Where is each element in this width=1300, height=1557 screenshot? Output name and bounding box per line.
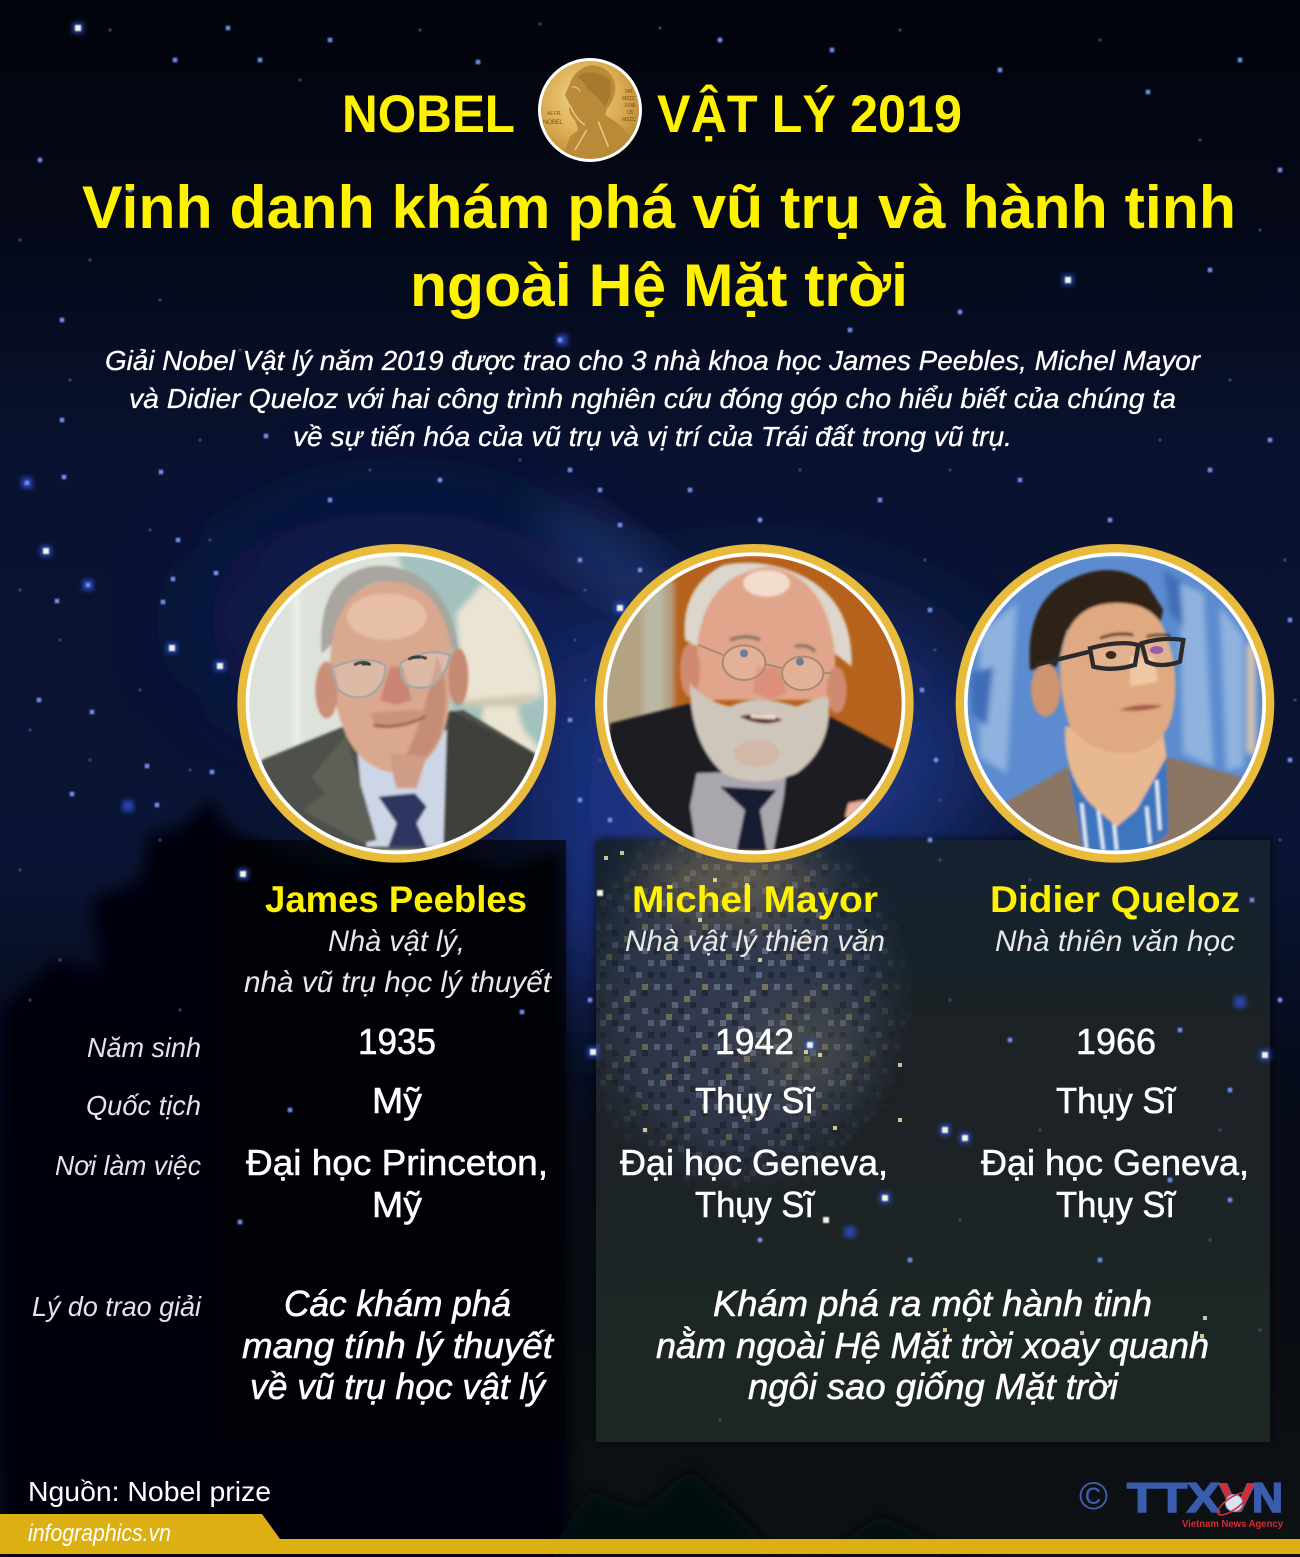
role: James Peebles <box>244 925 553 999</box>
footer bar <box>0 1514 1300 1554</box>
panel: left column <box>222 840 566 1440</box>
award reason: Mayor and Queloz: Khám phá ra một hành tinh <box>713 1283 1152 1324</box>
icon: nobel medal: OB. <box>627 110 634 116</box>
column: James Peebles facts: Mỹ <box>372 1080 422 1121</box>
source: Nguồn: Nobel prize <box>28 1476 271 1507</box>
award reason: Peebles: mang tính lý thuyết <box>242 1325 555 1366</box>
title: vat ly 2019: VẬT LÝ 2019 <box>657 83 962 144</box>
heading: line one: Vinh danh khám phá vũ trụ và hành tinh <box>82 174 1236 241</box>
award reason: Peebles <box>242 1283 555 1407</box>
heading: line two: ngoài Hệ Mặt trời <box>410 252 908 319</box>
logo: TTXVN: TTX <box>1127 1474 1220 1521</box>
name: Didier Queloz <box>990 879 1240 958</box>
row labels: Quốc tịch <box>86 1090 201 1121</box>
background: tree silhouettes <box>0 800 1000 1557</box>
column: Michel Mayor facts: 1942 <box>715 1021 794 1062</box>
icon: nobel medal: MDCCC <box>622 117 636 123</box>
name: Didier Queloz: Didier Queloz <box>990 879 1240 920</box>
column: Didier Queloz facts: Thụy Sĩ <box>1056 1080 1177 1121</box>
award reason: Peebles: về vũ trụ học vật lý <box>250 1366 547 1407</box>
name: Michel Mayor: Michel Mayor <box>632 879 878 920</box>
column: James Peebles facts: Mỹ <box>372 1184 422 1225</box>
column: James Peebles facts: Đại học Princeton, <box>246 1142 548 1183</box>
name: James Peebles: James Peebles <box>265 879 527 920</box>
title: nobel: NOBEL <box>342 85 515 144</box>
name: James Peebles <box>244 879 553 999</box>
logo: TTXVN <box>1079 1474 1283 1530</box>
column: Didier Queloz facts <box>981 1021 1249 1225</box>
portrait: James Peebles <box>237 544 556 863</box>
column: James Peebles facts: 1935 <box>358 1021 436 1062</box>
role: James Peebles: nhà vũ trụ học lý thuyết <box>244 966 553 999</box>
row labels: Nơi làm việc <box>55 1150 201 1181</box>
award reason: Mayor and Queloz <box>656 1283 1209 1407</box>
column: Didier Queloz facts: 1966 <box>1076 1021 1156 1062</box>
logo: TTXVN: Vietnam News Agency <box>1182 1519 1283 1530</box>
panel: right column <box>596 840 1270 1442</box>
award reason: Mayor and Queloz: nằm ngoài Hệ Mặt trời xoay quanh <box>656 1325 1209 1366</box>
intro text block: Giải Nobel Vật lý năm 2019 được trao cho 3 nhà khoa học James Peebles, Michel Mayor <box>105 345 1202 376</box>
column: Michel Mayor facts <box>620 1021 888 1225</box>
footer site name: infographics.vn <box>28 1520 171 1547</box>
row labels: Lý do trao giải <box>32 1291 202 1322</box>
icon: nobel medal: MDCCC <box>622 96 636 102</box>
role: Didier Queloz: Nhà thiên văn học <box>995 925 1235 958</box>
row labels: Năm sinh <box>87 1032 201 1063</box>
icon: nobel medal: NOBEL <box>543 119 563 126</box>
intro text block: và Didier Queloz với hai công trình nghiên cứu đóng góp cho hiểu biết của chúng ta <box>129 383 1176 414</box>
award reason: Peebles: Các khám phá <box>284 1283 511 1324</box>
logo: TTXVN: V <box>1218 1474 1256 1521</box>
icon: nobel medal: NAT. <box>625 89 633 95</box>
portrait: Didier Queloz <box>956 544 1274 863</box>
icon: nobel medal: XXXIII <box>624 103 635 109</box>
row labels <box>32 1032 202 1322</box>
logo: TTXVN: N <box>1252 1474 1283 1521</box>
column: Michel Mayor facts: Thụy Sĩ <box>695 1184 816 1225</box>
column: James Peebles facts <box>246 1021 548 1225</box>
award reason: Mayor and Queloz: ngôi sao giống Mặt trời <box>748 1366 1119 1407</box>
column: Didier Queloz facts: Thụy Sĩ <box>1056 1184 1177 1225</box>
intro text block <box>105 345 1202 452</box>
portrait: Michel Mayor <box>595 544 914 863</box>
icon: nobel medal: ALFR. <box>547 111 562 117</box>
column: Didier Queloz facts: Đại học Geneva, <box>981 1142 1249 1183</box>
logo: TTXVN: © <box>1079 1475 1108 1518</box>
column: Michel Mayor facts: Đại học Geneva, <box>620 1142 888 1183</box>
role: Michel Mayor: Nhà vật lý thiên văn <box>625 925 885 958</box>
intro text block: về sự tiến hóa của vũ trụ và vị trí của Trái đất trong vũ trụ. <box>293 421 1012 452</box>
name: Michel Mayor <box>625 879 885 958</box>
column: Michel Mayor facts: Thụy Sĩ <box>695 1080 816 1121</box>
icon: nobel medal <box>538 58 642 162</box>
role: James Peebles: Nhà vật lý, <box>328 925 465 958</box>
